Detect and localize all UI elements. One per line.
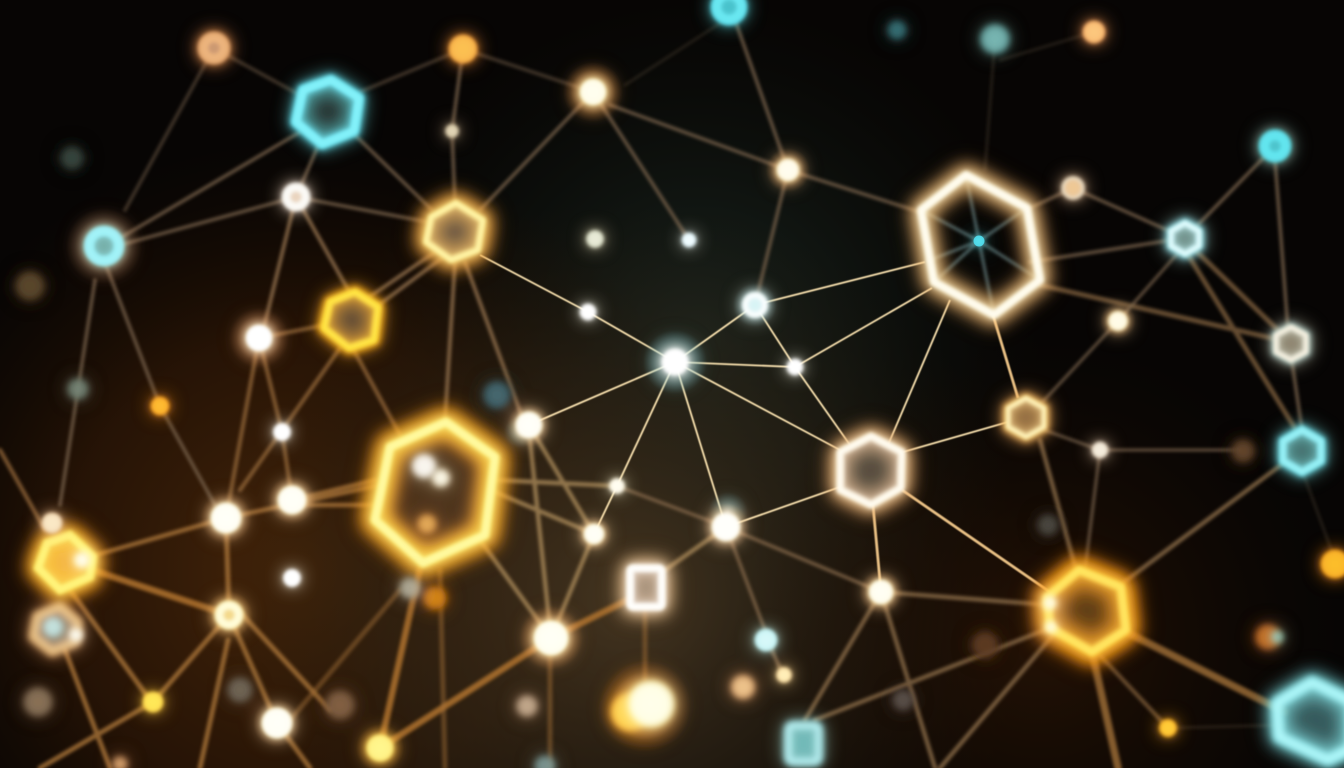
dot: bottom white [253,699,301,747]
dot: pale far left [42,513,62,533]
dot: bottom left orange [143,692,163,712]
dot: white [787,359,803,375]
dot: tiny [610,478,624,494]
dot: orange right edge [1321,550,1344,578]
dot: hub centre [643,330,707,394]
dot: top teal [981,25,1009,53]
hexagon: cyan top left [296,80,359,144]
dot: upper orange [766,148,810,192]
dot: top tan [449,35,477,63]
dot: lower tan [732,676,754,698]
dot: inner hex c [418,515,436,533]
hexagon: pale right [1276,327,1306,360]
hexagon: small right [1008,398,1044,437]
ring node: cyan right [1249,120,1301,172]
dot: right small [1092,442,1108,458]
dot: ring left [286,187,306,207]
dot: white lower [284,570,300,586]
hexagon: yellow upper [426,203,483,260]
dot: right tan [1063,178,1083,198]
dot: top orange [563,62,623,122]
dot: top right orange [1083,21,1105,43]
bright thin edges [480,255,1050,592]
dot: lower pale [776,668,792,682]
hexagon: cyan right lower [1283,430,1321,472]
dot: cyan ring [733,283,777,327]
dot: cyan [682,233,696,247]
dot: bright left a [200,492,252,544]
dot: orange-teal right [1256,625,1283,649]
hexagon: cyan right upper [1171,223,1199,254]
dot: yellow ring [205,591,253,639]
dot: white left [229,308,289,368]
warm lower edges [0,320,1285,768]
dot: top dark teal [888,21,906,39]
ring node: cyan left [66,208,142,284]
dot: centre lower [702,492,750,551]
large hexagon spokes [921,175,1040,315]
dot: lower right [859,570,903,614]
hexagon: white centre [840,436,902,505]
dot: large bottom [599,660,691,752]
dot: orange left [151,397,169,415]
hexagon: yellow far left [38,535,93,590]
ring node: top left tan [188,22,240,74]
hexagon: large top right [921,175,1040,315]
dot: lower cyan [755,629,777,651]
dot: bottom yellow [356,724,404,768]
dot: inner hex a [413,455,435,477]
hexagon: yellow mid [324,292,378,348]
dot: orange bottom right [1160,720,1176,736]
dot: hex centre cyan [974,236,984,246]
hexagon: large left [375,422,495,563]
dot: right orange [1100,303,1136,339]
ring node: cyan top [716,0,742,20]
dot: pale white [580,304,596,320]
dot: pale [586,230,604,248]
dot: mid [576,516,612,552]
dot: bright left b [268,476,316,524]
dot: small grey [446,124,458,138]
dot: white small [274,424,290,440]
square node: cyan [788,725,819,762]
dot: bright [504,403,551,448]
square node: white [630,568,662,607]
out-of-focus dots [16,147,1254,768]
dot: bright bottom [519,606,583,670]
hexagon: cyan bottom right [1277,682,1344,760]
hexagon: orange lower right [1043,570,1126,652]
dot: inner hex b [433,470,449,486]
hexagon: dim far left [33,606,82,652]
